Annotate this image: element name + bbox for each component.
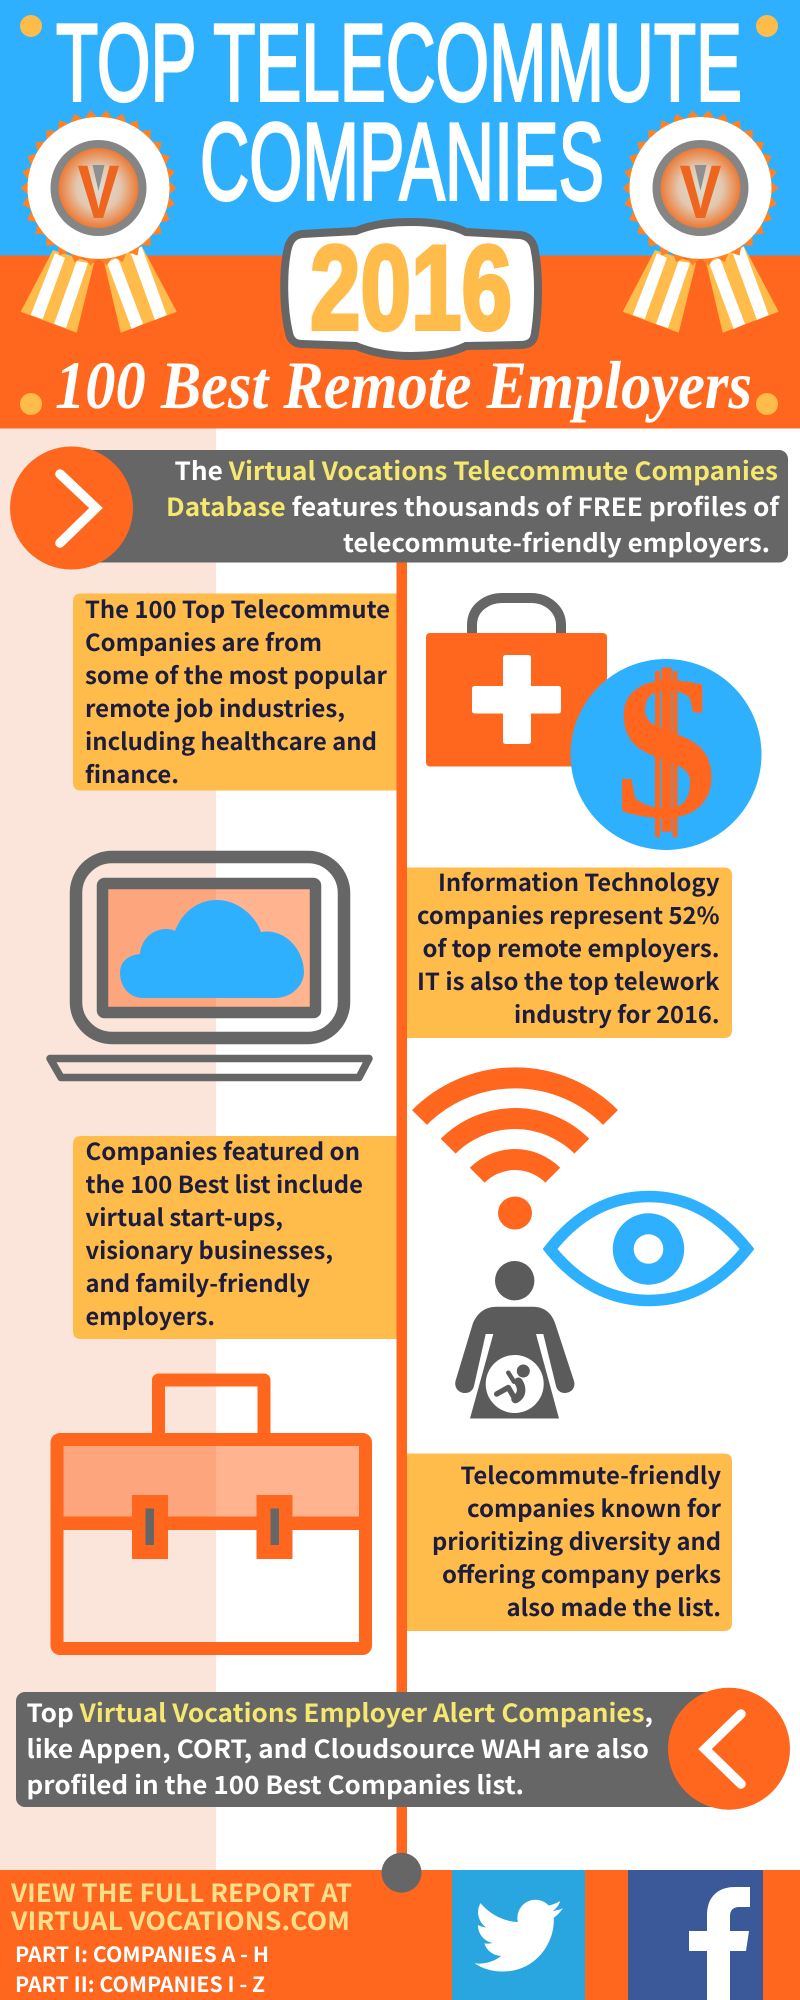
intro text <box>166 452 781 560</box>
icon: facebook <box>628 1870 763 2000</box>
panel: companies featured text: virtual start-ups, <box>86 1199 283 1233</box>
panel: information technology text <box>407 864 732 1038</box>
icon: eye <box>550 1196 747 1300</box>
panel: diversity and perks text: also made the list. <box>506 1589 721 1623</box>
corner dots <box>20 15 778 415</box>
employer alert text: profiled in the 100 Best Companies list. <box>26 1766 524 1802</box>
footer call to action: PART I: COMPANIES A - H <box>15 1939 269 1969</box>
panel: industries text: including healthcare and <box>85 723 377 757</box>
footer band <box>0 1870 800 2000</box>
panel: companies featured text: visionary businesses, <box>86 1232 333 1266</box>
panel: diversity and perks text: offering company perks <box>442 1556 721 1590</box>
icon: briefcase <box>57 1380 366 1648</box>
icon: wifi signal <box>420 1078 610 1230</box>
panel: companies featured text: the 100 Best list include <box>86 1166 363 1200</box>
icon: twitter <box>452 1870 585 2000</box>
icon: baby <box>497 1364 530 1399</box>
icon: dollar coin: $ <box>615 634 717 861</box>
panel: industries text: Companies are from <box>85 624 322 658</box>
icon: laptop with cloud <box>50 857 369 1078</box>
panel: information technology text: IT is also the top telework <box>417 963 720 997</box>
timeline end dot <box>382 1853 422 1893</box>
icon: right rosette award <box>622 110 779 333</box>
panel: diversity and perks text: companies known for <box>467 1490 722 1524</box>
panel: industries text: some of the most popular <box>85 657 388 691</box>
intro text: Database features thousands of FREE profiles of <box>166 488 781 524</box>
panel: industries text: remote job industries, <box>85 690 345 724</box>
intro text: telecommute-friendly employers. <box>343 524 770 560</box>
panel: industries text: The 100 Top Telecommute <box>85 591 390 625</box>
employer alert text <box>26 1694 653 1802</box>
icon: medical bag <box>426 598 607 766</box>
panel: diversity and perks text <box>407 1454 732 1631</box>
intro banner <box>10 446 788 570</box>
timeline line <box>396 560 407 1860</box>
icon: left rosette award <box>20 110 177 333</box>
panel: diversity and perks text: prioritizing diversity and <box>432 1523 721 1557</box>
panel: information technology text: companies represent 52% <box>417 897 720 931</box>
icon: left chevron circle <box>668 1688 790 1810</box>
employer alert text: Top Virtual Vocations Employer Alert Companies , <box>26 1694 653 1730</box>
panel: companies featured text: Companies featured on <box>86 1133 360 1167</box>
panel: companies featured text: and family-friendly <box>86 1265 311 1299</box>
employer alert text: like Appen, CORT, and Cloudsource WAH are also <box>26 1730 649 1766</box>
panel: industries text <box>73 591 396 790</box>
header: blue and orange bands <box>0 0 800 428</box>
panel: industries text: finance. <box>85 756 179 790</box>
plaque: 2016: 2016 <box>310 221 512 355</box>
panel: information technology text: Information Technology <box>438 864 720 898</box>
title <box>56 2 742 224</box>
panel: companies featured text: employers. <box>86 1298 215 1332</box>
panel: diversity and perks text: Telecommute-friendly <box>460 1457 722 1491</box>
footer call to action: VIRTUAL VOCATIONS.COM <box>10 1902 350 1938</box>
icon: left rosette award: V <box>78 150 120 235</box>
icon: dollar coin <box>570 634 762 861</box>
panel: information technology text: industry for 2016. <box>514 996 720 1030</box>
icon: pregnant woman <box>455 1261 574 1418</box>
footer call to action: PART II: COMPANIES I - Z <box>15 1969 265 1999</box>
footer call to action: VIEW THE FULL REPORT AT <box>10 1874 352 1910</box>
intro text: The Virtual Vocations Telecommute Companies <box>174 452 778 488</box>
panel: companies featured text <box>73 1133 396 1339</box>
panel: information technology text: of top remote employers. <box>422 930 720 964</box>
footer call to action <box>10 1874 352 1999</box>
icon: right chevron circle <box>10 446 133 570</box>
employer alert banner <box>16 1688 790 1810</box>
